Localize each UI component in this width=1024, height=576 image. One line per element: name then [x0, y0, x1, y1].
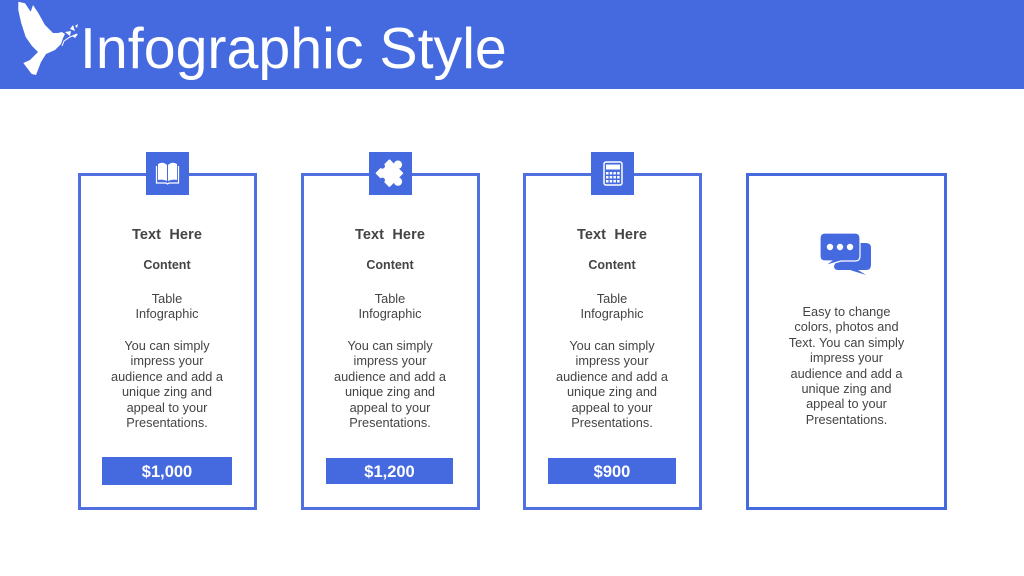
icon: chat bubbles [820, 234, 871, 275]
card 2 subheading: Content [366, 258, 414, 272]
card 1 body text: You can simply [124, 338, 210, 353]
card 3 price: $900 [594, 463, 630, 481]
card 3 body text: audience and add a [556, 369, 668, 384]
card 3 table label [580, 291, 644, 321]
icon: puzzle piece [369, 152, 412, 195]
panel: card 4 [746, 173, 947, 510]
card 3 body text: Presentations. [571, 415, 653, 430]
card 1 table label: Table [152, 291, 182, 306]
card 4 body text: unique zing and [801, 381, 892, 396]
card 4 body text: Easy to change [803, 304, 890, 319]
card 3 body text: impress your [576, 353, 648, 368]
card 3 body text [556, 338, 668, 430]
card 2 heading: Text Here [355, 227, 425, 243]
card 3 frame [523, 173, 702, 510]
card 3 body text: unique zing and [567, 384, 657, 399]
card 3 price [548, 458, 676, 484]
header band [0, 0, 1024, 89]
card 4 body text [789, 304, 904, 427]
card 3 body text: You can simply [569, 338, 655, 353]
card 1 body text: Presentations. [126, 415, 208, 430]
panel: card 3 [523, 152, 702, 510]
card 2 frame [301, 173, 480, 510]
card 4 body text: audience and add a [790, 366, 903, 381]
card 2 price [326, 458, 453, 484]
card 1 price [102, 457, 232, 485]
title: Infographic Style [80, 17, 507, 81]
card 3 body text: appeal to your [572, 400, 652, 415]
card 2 table label: Table [375, 291, 405, 306]
card 1 frame [78, 173, 257, 510]
card 4 body text: impress your [810, 350, 883, 365]
panel: card 2 [301, 152, 480, 510]
card 3 subheading: Content [588, 258, 636, 272]
card 4 body text: Text. You can simply [789, 335, 904, 350]
card 3 table label: Infographic [580, 306, 644, 321]
card 3 heading: Text Here [577, 227, 647, 243]
card 4 body text: colors, photos and [794, 319, 899, 334]
card 2 table label: Infographic [358, 306, 422, 321]
card 2 body text [334, 338, 446, 430]
panel: card 1 [78, 152, 257, 510]
card 1 subheading: Content [143, 258, 191, 272]
card 4 body text: Presentations. [806, 412, 887, 427]
card 2 body text: unique zing and [345, 384, 435, 399]
card 1 body text: appeal to your [127, 400, 207, 415]
card 2 body text: Presentations. [349, 415, 431, 430]
card 4 body text: appeal to your [806, 396, 887, 411]
card 2 body text: You can simply [347, 338, 433, 353]
card 1 body text: audience and add a [111, 369, 223, 384]
card 1 body text: impress your [130, 353, 203, 368]
card 2 body text: impress your [354, 353, 426, 368]
card 2 price: $1,200 [364, 463, 415, 481]
card 1 price: $1,000 [142, 463, 192, 481]
card 2 table label [358, 291, 422, 321]
card 1 table label [135, 291, 199, 321]
card 2 body text: audience and add a [334, 369, 446, 384]
card 1 body text [111, 338, 223, 430]
card 2 body text: appeal to your [350, 400, 430, 415]
card 1 table label: Infographic [135, 306, 199, 321]
card 1 body text: unique zing and [122, 384, 212, 399]
icon: open book [146, 152, 189, 195]
icon: dove with olive branch [18, 2, 78, 75]
card 1 heading: Text Here [132, 227, 202, 243]
card 3 table label: Table [597, 291, 627, 306]
icon: calculator [591, 152, 634, 195]
